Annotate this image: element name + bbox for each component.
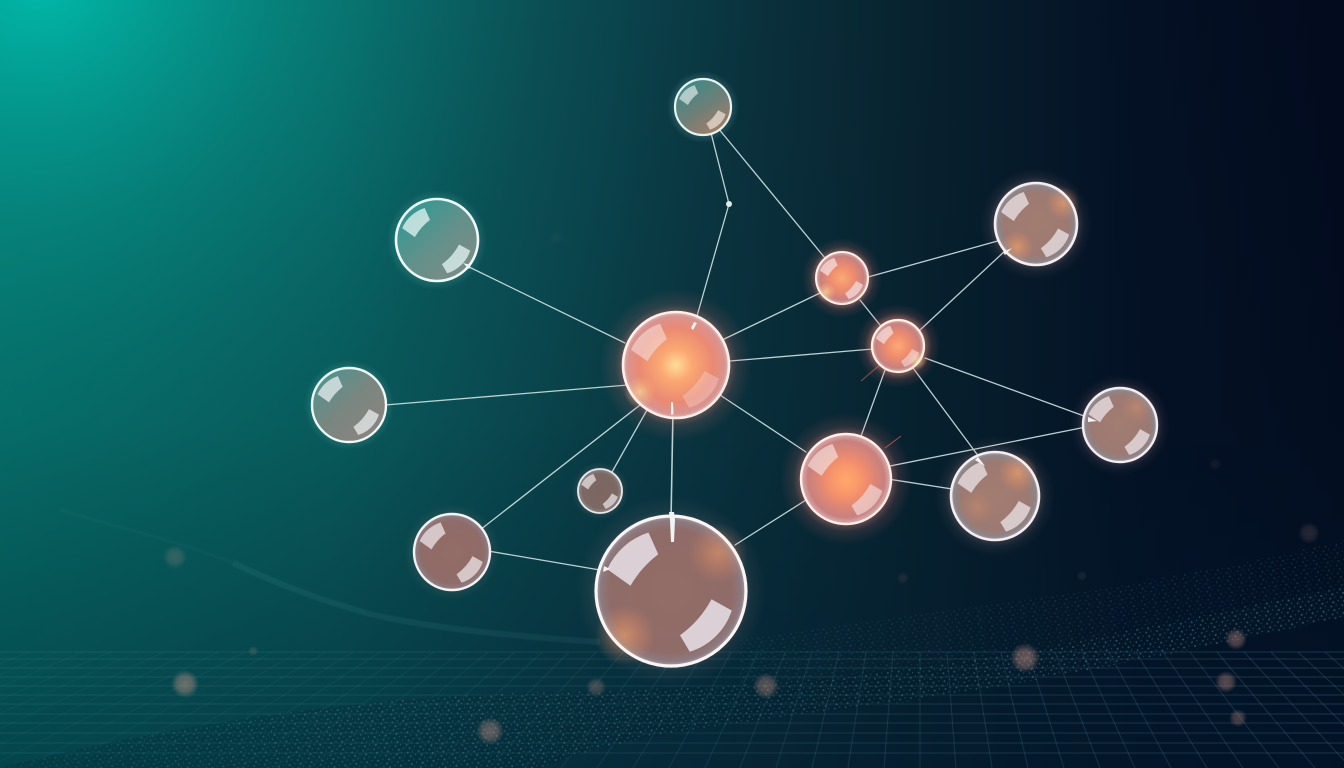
bubble: large bottom xyxy=(576,496,766,686)
bokeh particles xyxy=(163,231,1320,745)
bubble: lower left xyxy=(404,504,500,600)
junction node xyxy=(726,201,732,207)
bubble: node upper right small xyxy=(802,238,882,318)
dotted wave surface xyxy=(0,540,1344,768)
bubble: lower right brown xyxy=(935,436,1055,556)
connector lines xyxy=(385,125,1096,570)
faint wave ribbon xyxy=(60,510,600,642)
bubble: far right xyxy=(1070,375,1170,475)
bubble: central hub xyxy=(600,289,752,441)
bubble: left xyxy=(304,360,394,450)
bubble: upper left teal xyxy=(387,190,487,290)
perspective grid floor xyxy=(0,652,1344,768)
line end caps on bubbles xyxy=(463,248,1097,572)
bubble: small center xyxy=(571,462,629,520)
bubble: node right bright xyxy=(856,304,940,388)
bubble: lower right orange xyxy=(780,413,912,545)
bubble: top right xyxy=(980,168,1092,280)
bubble: top xyxy=(667,71,739,143)
